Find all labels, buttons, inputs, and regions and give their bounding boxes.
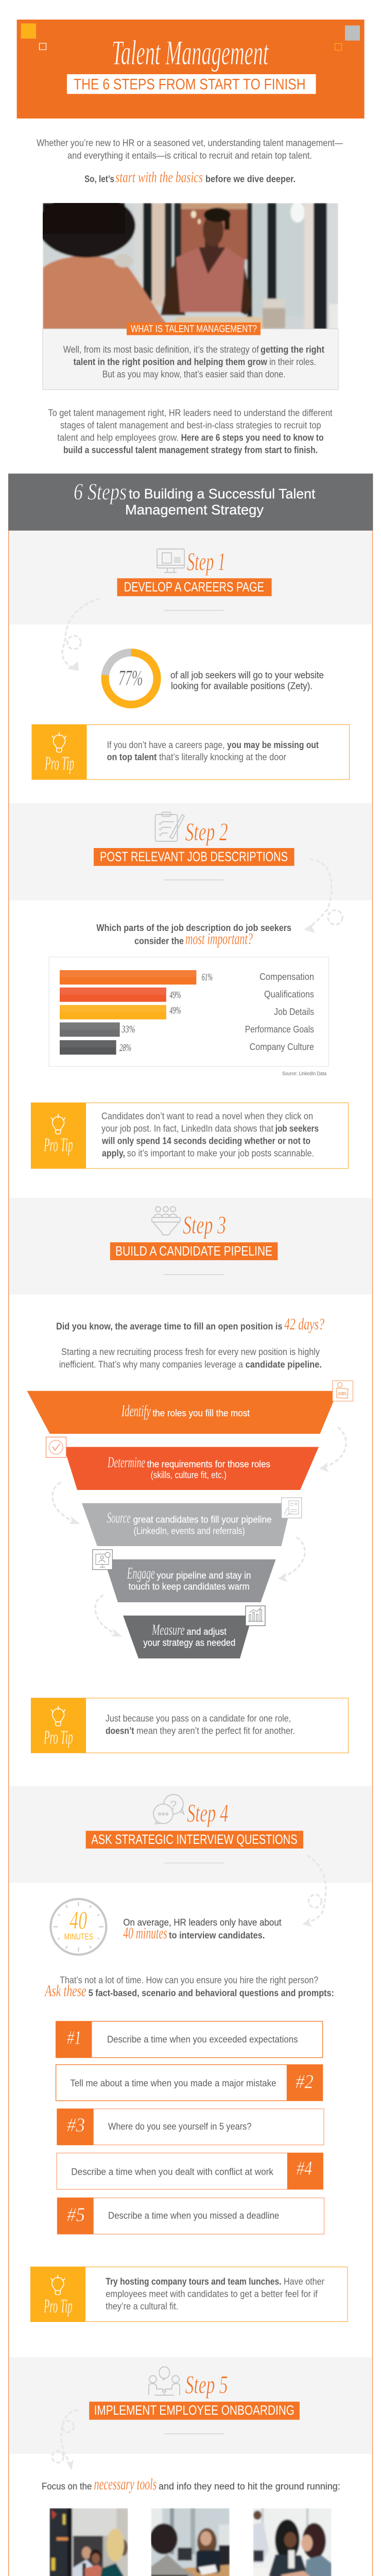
chart question heading: Which parts of the job description do job seekers <box>96 923 291 933</box>
pro tip text: Try hosting company tours and team lunches. <box>106 2277 282 2287</box>
pro tip text: job seekers <box>275 1123 319 1133</box>
bar: qualifications 49%: Qualifications <box>264 989 314 999</box>
arrow: dashed path <box>95 1595 122 1637</box>
icon: video call <box>93 1550 112 1569</box>
icon: 40 minute clock: MINUTES <box>64 1932 93 1941</box>
funnel: source: (LinkedIn, events and referrals) <box>134 1526 245 1536</box>
intro paragraph: and everything it entails—is critical to recruit and retain top talent. <box>67 150 312 161</box>
stat: average time to fill: Did you know, the average time to fill an open position is <box>56 1321 282 1331</box>
pro tip text: mean they aren’t the perfect fit for another. <box>136 1725 295 1736</box>
step label: Step 3 <box>183 1210 226 1239</box>
pro tip text: that’s literally knocking at the door <box>159 752 286 762</box>
decorative white outline square <box>39 43 46 49</box>
onboarding lead line <box>42 2475 340 2493</box>
question 1: #1 <box>67 2027 81 2048</box>
pro tip text <box>106 1714 295 1736</box>
panel: step 3 header <box>9 1198 372 1295</box>
pro tip 2 <box>31 1103 348 1168</box>
question 3 <box>57 2109 324 2145</box>
intro lead line: So, let’s <box>84 174 114 184</box>
definition text: But as you may know, that’s easier said than done. <box>102 369 285 379</box>
bar: compensation 61%: 61% <box>202 972 213 983</box>
question 5: Describe a time when you missed a deadline <box>108 2210 279 2221</box>
funnel: source <box>82 1498 302 1546</box>
onboarding lead line: and info they need to hit the ground running: <box>159 2481 340 2492</box>
icon: 40 minute clock: 40 <box>70 1905 87 1934</box>
decorative yellow outline square <box>335 43 342 50</box>
pro tip 3: Pro Tip <box>44 1726 73 1748</box>
pro tip 3 <box>31 1698 348 1753</box>
step label: Step 1 <box>187 547 226 576</box>
chart source: Source: LinkedIn Data <box>282 1071 326 1077</box>
funnel: engage: touch to keep candidates warm <box>129 1581 250 1591</box>
definition text: Well, from its most basic definition, it’s the strategy of <box>63 345 259 355</box>
heading: build a candidate pipeline: BUILD A CANDIDATE PIPELINE <box>115 1244 272 1259</box>
heading: build a candidate pipeline <box>110 1242 278 1260</box>
funnel: engage <box>93 1550 276 1602</box>
pro tip text: Have other <box>284 2277 324 2287</box>
paragraph: candidate pipeline: Starting a new recruiting process fresh for every new position is highly <box>61 1347 320 1357</box>
heading: ask strategic interview questions: ASK STRATEGIC INTERVIEW QUESTIONS <box>91 1833 298 1847</box>
heading: develop a careers page <box>117 578 272 596</box>
intro lead line: before we dive deeper. <box>205 174 296 184</box>
chart: 77 percent donut <box>105 652 157 705</box>
chart question heading: consider the <box>134 936 184 946</box>
icon: 40 minute clock <box>50 1899 106 1955</box>
arrow: dashed path <box>304 859 342 933</box>
card: schedule check-ins <box>253 2508 332 2576</box>
step label: Step 5 <box>185 2370 228 2399</box>
questions intro: 5 fact-based, scenario and behavioral questions and prompts: <box>89 1988 334 1998</box>
question 4: Describe a time when you dealt with conflict at work <box>71 2167 274 2177</box>
heading: post relevant job descriptions: POST RELEVANT JOB DESCRIPTIONS <box>100 850 288 865</box>
question 5: #5 <box>67 2204 85 2226</box>
bar: performance goals 33%: Performance Goals <box>245 1024 314 1035</box>
stat text: 77 percent <box>170 670 324 691</box>
pro tip text: apply, <box>102 1148 125 1158</box>
section heading bar: Management Strategy <box>125 502 264 518</box>
bar: job details 49% <box>60 1005 314 1020</box>
paragraph: 6 steps intro: build a successful talent management strategy from start to finish. <box>63 445 318 455</box>
pro tip text: Just because you pass on a candidate for one role, <box>106 1714 291 1724</box>
onboarding lead line: Focus on the <box>42 2481 92 2492</box>
bar: qualifications 49%: 49% <box>169 989 181 1001</box>
definition text: in their roles. <box>269 357 316 367</box>
panel: step 5 header <box>9 2357 372 2454</box>
section heading bar: to Building a Successful Talent <box>129 486 316 502</box>
intro paragraph: Whether you’re new to HR or a seasoned vet, understanding talent management— <box>37 138 343 148</box>
stat text: 40 minutes: 40 minutes <box>123 1924 167 1942</box>
panel: step 4 header <box>9 1786 372 1883</box>
header banner <box>17 20 365 118</box>
question 2: #2 <box>296 2071 314 2093</box>
funnel: measure <box>123 1606 265 1658</box>
pro tip 4: Pro Tip <box>44 2296 73 2317</box>
bar: company culture 28%: Company Culture <box>250 1042 314 1052</box>
pro tip text: If you don’t have a careers page, <box>107 740 224 750</box>
icon: light bulb <box>51 1114 65 1134</box>
arrow: dashed path <box>303 1855 326 1927</box>
photo: team at sticky note board <box>49 2508 128 2576</box>
question 3: #3 <box>67 2114 85 2136</box>
question 3: Where do you see yourself in 5 years? <box>108 2121 251 2131</box>
intro paragraph <box>37 138 343 161</box>
intro lead line <box>84 168 296 185</box>
funnel: determine: Determine <box>107 1454 145 1471</box>
funnel: identify <box>27 1381 353 1434</box>
heading: post relevant job descriptions <box>94 848 295 866</box>
pro tip 4 <box>30 2267 348 2321</box>
photo: two women talking at a table <box>38 194 338 329</box>
pro tip 2: Pro Tip <box>44 1134 73 1156</box>
icon: two people talking at table <box>149 2367 180 2395</box>
bar: company culture 28%: 28% <box>119 1042 131 1054</box>
paragraph: candidate pipeline <box>59 1347 322 1369</box>
funnel: measure: Measure <box>151 1621 185 1638</box>
chart question heading <box>96 923 291 948</box>
paragraph: 6 steps intro <box>48 408 333 455</box>
bar: compensation 61% <box>60 970 314 985</box>
definition text: talent in the right position and helping them grow <box>73 357 268 367</box>
section heading bar: 6 Steps <box>74 478 127 504</box>
card: assign a mentor <box>150 2508 230 2576</box>
icon: monitor <box>157 549 184 572</box>
funnel: engage: your pipeline and stay in <box>157 1570 251 1581</box>
paragraph: candidate pipeline: candidate pipeline. <box>246 1359 322 1369</box>
onboarding lead line: necessary tools <box>94 2475 157 2493</box>
question 4 <box>57 2153 323 2190</box>
pro tip text: employees meet with candidates to get a better feel for if <box>106 2289 318 2299</box>
question 1: Describe a time when you exceeded expectations <box>107 2035 298 2045</box>
icon: light bulb <box>51 1706 65 1726</box>
paragraph: 6 steps intro: To get talent management right, HR leaders need to understand the different <box>48 408 333 418</box>
paragraph: 6 steps intro: stages of talent management and best-in-class strategies to recruit top <box>60 420 321 430</box>
chart question heading: most important? <box>185 929 253 948</box>
photo: two colleagues reviewing papers <box>253 2508 332 2576</box>
icon: jobs sign <box>333 1381 353 1401</box>
arrow: dashed path <box>320 1427 346 1472</box>
pro tip 1 <box>32 724 350 780</box>
definition text: getting the right <box>261 345 324 355</box>
subtitle band: THE 6 STEPS FROM START TO FINISH <box>74 76 306 93</box>
section heading bar <box>8 473 373 531</box>
chart: 77 percent donut: 77% <box>118 667 143 690</box>
arrow: dashed path <box>62 599 99 671</box>
arrow: dashed path <box>278 1537 305 1582</box>
pro tip text: on top talent <box>107 752 157 762</box>
icon: resume in hand <box>282 1498 302 1518</box>
question 4: #4 <box>297 2158 312 2179</box>
heading: develop a careers page: DEVELOP A CAREERS PAGE <box>124 580 264 595</box>
bar chart <box>49 957 328 1066</box>
funnel: identify: the roles you fill the most <box>152 1408 250 1418</box>
step label: Step 2 <box>185 817 228 846</box>
stat text: 77 percent: looking for available positions (Zety). <box>171 681 313 691</box>
funnel: determine: the requirements for those roles <box>147 1459 270 1469</box>
pro tip text: Candidates don’t want to read a novel when they click on <box>101 1111 313 1121</box>
panel: what is talent management <box>43 323 338 389</box>
paragraph: 6 steps intro: Here are 6 steps you need to know to <box>181 433 324 443</box>
pro tip text <box>101 1111 319 1158</box>
arrow: dashed path <box>53 1482 80 1524</box>
icon: light bulb <box>50 2275 65 2295</box>
funnel: measure: your strategy as needed <box>143 1637 235 1648</box>
bar: performance goals 33%: 33% <box>122 1024 135 1035</box>
bar: compensation 61%: Compensation <box>259 972 314 982</box>
decorative yellow square <box>21 23 36 39</box>
pro tip text <box>106 2277 324 2312</box>
photo: one on one meeting <box>150 2508 230 2576</box>
pro tip text: you may be missing out <box>227 740 319 750</box>
paragraph: 6 steps intro: talent and help employees grow. <box>57 433 179 443</box>
pro tip text: they’re a cultural fit. <box>106 2301 178 2312</box>
main frame <box>9 530 372 2576</box>
label tag: WHAT IS TALENT MANAGEMENT? <box>131 323 257 334</box>
heading: ask strategic interview questions <box>86 1831 303 1849</box>
icon: speech bubbles <box>153 1794 184 1824</box>
question 1 <box>56 2021 323 2058</box>
decorative gray square <box>345 25 360 41</box>
icon: speech bubbles: ? <box>170 1799 177 1812</box>
stat text: 40 minutes: to interview candidates. <box>169 1930 265 1940</box>
funnel: engage: Engage <box>127 1564 155 1582</box>
funnel: source: Source <box>107 1509 131 1526</box>
questions intro: Ask these <box>44 1981 86 2000</box>
icon: jobs sign: JOBS <box>338 1391 347 1396</box>
stat: average time to fill <box>56 1315 324 1333</box>
icon: growth chart <box>246 1606 265 1626</box>
bar: qualifications 49% <box>60 988 314 1002</box>
questions intro <box>44 1975 334 2000</box>
stat text: 40 minutes: On average, HR leaders only have about <box>123 1918 282 1928</box>
funnel: source: great candidates to fill your pipeline <box>133 1514 272 1524</box>
stat text: 40 minutes <box>123 1918 282 1942</box>
funnel: identify: Identify <box>121 1401 151 1420</box>
arrow: dashed path <box>52 2410 78 2470</box>
pro tip label: Pro Tip <box>44 753 74 774</box>
panel: step 1 header <box>9 531 372 624</box>
funnel: determine <box>46 1437 319 1490</box>
heading: implement employee onboarding <box>89 2402 300 2420</box>
funnel: measure: and adjust <box>186 1626 227 1637</box>
pro tip text: your job post. In fact, LinkedIn data shows that <box>101 1123 273 1133</box>
pro tip text: doesn’t <box>106 1725 134 1736</box>
intro lead line: start with the basics <box>115 168 203 185</box>
bar: job details 49%: 49% <box>169 1005 181 1016</box>
bar: company culture 28% <box>60 1040 314 1055</box>
bar: performance goals 33% <box>60 1022 314 1037</box>
icon: clipboard and pen <box>155 812 184 841</box>
pro tip text <box>107 740 319 762</box>
bar: job details 49%: Job Details <box>274 1007 314 1017</box>
stat text: 77 percent: of all job seekers will go to your website <box>170 670 324 680</box>
icon: funnel of people <box>152 1207 180 1235</box>
icon: light bulb <box>52 732 66 752</box>
question 2 <box>56 2064 323 2101</box>
icon: check badge <box>46 1437 66 1458</box>
question 5 <box>57 2198 324 2234</box>
step label: Step 4 <box>187 1798 229 1827</box>
card: simplify your process <box>49 2508 128 2576</box>
definition text <box>63 345 324 379</box>
questions intro: That’s not a lot of time. How can you ensure you hire the right person? <box>60 1975 318 1985</box>
panel: step 2 header <box>9 803 372 901</box>
heading: implement employee onboarding: IMPLEMENT EMPLOYEE ONBOARDING <box>94 2403 295 2418</box>
paragraph: candidate pipeline: inefficient. That’s why many companies leverage a <box>59 1359 244 1369</box>
pro tip text: will only spend 14 seconds deciding whether or not to <box>101 1136 310 1146</box>
question 2: Tell me about a time when you made a major mistake <box>70 2078 276 2089</box>
pro tip text: so it’s important to make your job posts scannable. <box>127 1148 314 1158</box>
stat: average time to fill: 42 days? <box>284 1315 324 1333</box>
funnel: determine: (skills, culture fit, etc.) <box>151 1470 227 1480</box>
